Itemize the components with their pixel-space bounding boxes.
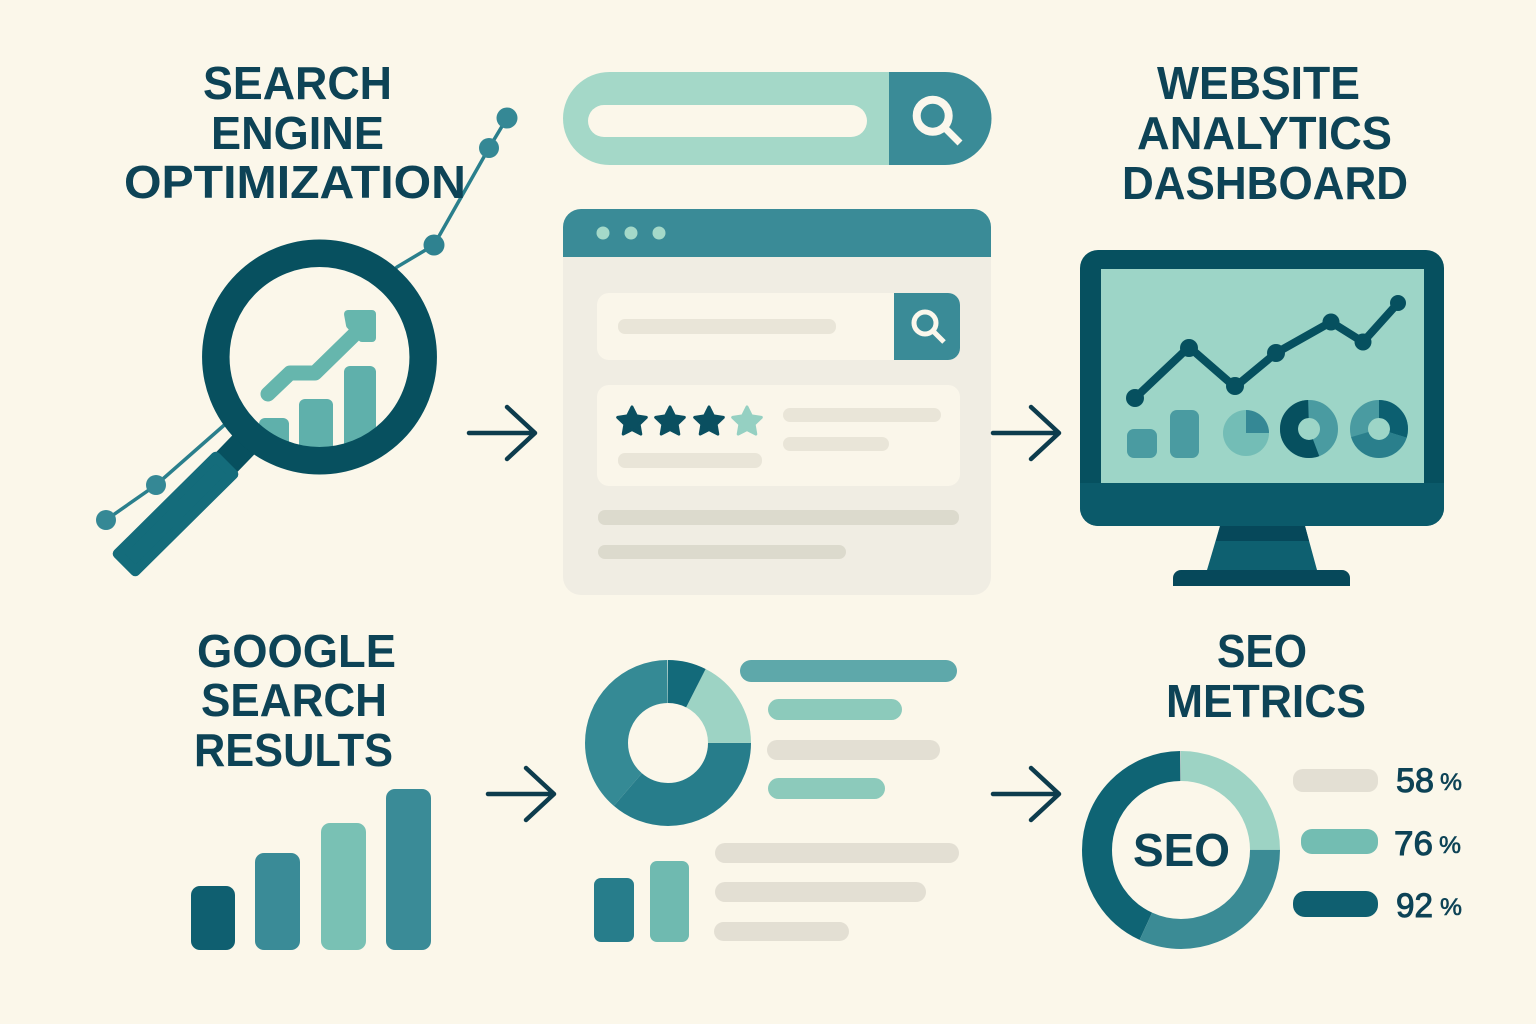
- donut chart: report: [606, 682, 730, 804]
- heading: website analytics dashboard: DASHBOARD: [1122, 157, 1408, 209]
- metric row: 76 percent: [1301, 825, 1461, 863]
- metric row: 58 percent: 58: [1396, 762, 1434, 800]
- icon: rising trend line with points: [96, 108, 518, 530]
- panel: monitor dashboard: [1080, 250, 1444, 586]
- metric row: 76 percent: 76: [1394, 825, 1433, 863]
- arrow: report to metrics: [993, 768, 1059, 820]
- heading: seo metrics: [1166, 625, 1366, 727]
- icon: magnifying glass neck: [222, 438, 250, 467]
- icon: growth arrow inside lens: [268, 314, 372, 394]
- search result card with star rating: [597, 385, 960, 486]
- placeholder text lines: [598, 510, 959, 559]
- monitor stand: [1173, 526, 1350, 586]
- bar widgets on screen: [1127, 410, 1199, 458]
- heading: google search results: SEARCH: [201, 674, 387, 726]
- heading: seo metrics: SEO: [1217, 625, 1307, 677]
- heading: website analytics dashboard: [1122, 57, 1408, 209]
- arrow: browser to dashboard: [993, 407, 1059, 459]
- icon: magnifying glass lens background: [230, 267, 410, 447]
- metric row: 58 percent: [1293, 762, 1462, 800]
- monitor screen: [1101, 269, 1424, 483]
- icon: magnifying glass handle: [118, 457, 233, 571]
- icon: search magnifier: [917, 100, 960, 143]
- donut chart on screen: [1289, 409, 1329, 449]
- heading: search engine optimization: SEARCH: [203, 57, 392, 109]
- heading: google search results: [194, 625, 396, 776]
- metric row: 92 percent: 92: [1396, 887, 1433, 925]
- arrow: results to report: [488, 768, 554, 820]
- heading: search engine optimization: ENGINE: [211, 107, 384, 159]
- panel: browser window: [563, 209, 991, 595]
- small bar chart: report: [594, 861, 689, 942]
- report bars beside donut: [740, 660, 957, 799]
- placeholder lines: report: [714, 843, 959, 941]
- heading: search engine optimization: OPTIMIZATION: [124, 156, 466, 208]
- metric row: 92 percent: %: [1440, 894, 1462, 921]
- metric row: 92 percent: [1293, 887, 1462, 925]
- heading: website analytics dashboard: WEBSITE: [1157, 57, 1360, 109]
- arrow: seo to browser: [469, 407, 535, 459]
- metric row: 58 percent: %: [1440, 769, 1462, 796]
- heading: search engine optimization: [124, 57, 466, 208]
- browser search field: [597, 293, 960, 360]
- panel: search engine optimization illustration: [96, 108, 518, 571]
- heading: google search results: RESULTS: [194, 724, 393, 776]
- donut center label: SEO: [1133, 824, 1230, 876]
- line chart on screen: [1126, 295, 1406, 407]
- heading: google search results: GOOGLE: [197, 625, 396, 677]
- monitor frame: [1080, 250, 1444, 526]
- icon: magnifying glass ring: [216, 253, 423, 461]
- window control dots: [596, 226, 666, 240]
- metric row: 76 percent: %: [1439, 832, 1461, 859]
- chart: bars inside lens: [259, 366, 376, 459]
- heading: website analytics dashboard: ANALYTICS: [1137, 107, 1392, 159]
- donut chart: seo metrics: [1097, 766, 1265, 934]
- segmented donut chart on screen: [1359, 409, 1399, 449]
- bar chart: google results: [191, 789, 431, 950]
- heading: seo metrics: METRICS: [1166, 675, 1366, 727]
- pie chart on screen: [1223, 410, 1269, 456]
- search bar: [563, 72, 992, 165]
